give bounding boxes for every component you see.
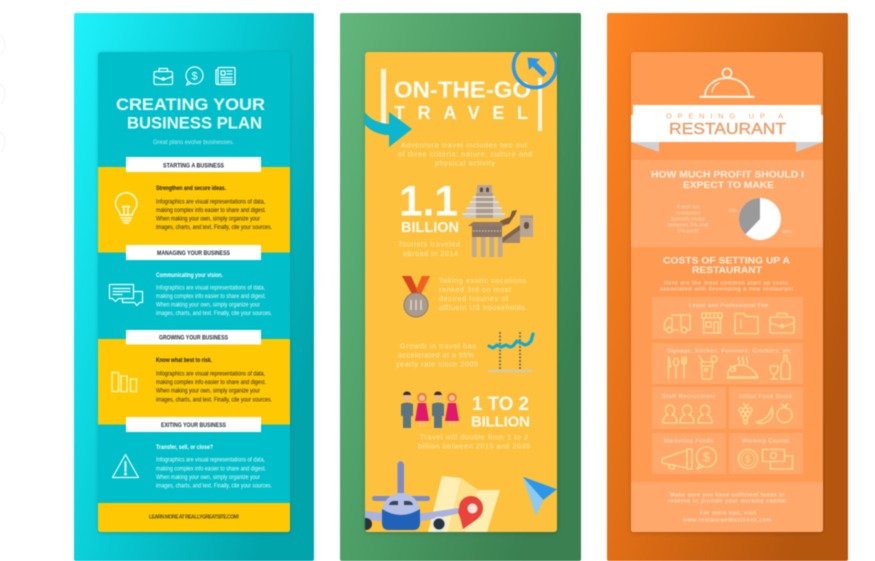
icon: dollar bubble: $ [191,70,198,82]
icon: storefront [702,313,722,333]
icon: teal curved arrow [364,112,412,148]
section: growing your business [98,330,290,424]
section: managing your business: MANAGING YOUR BUSINESS [157,250,230,257]
section: starting a business [98,157,290,252]
footer note: For more tips, visit [700,511,756,517]
line chart [488,332,533,371]
footer note: reserve to provide your working capital [668,498,786,504]
box: working capital: Working Capital [742,439,789,445]
stat: 1.1 billion: BILLION [401,220,459,236]
section: managing your business: Infographics are visual representations of data, [156,284,265,292]
intro paragraph: Adventure travel includes two out [401,140,527,150]
text: growth in travel: yearly rate since 2005 [396,360,478,369]
icon: map [428,476,500,532]
profit description [668,204,708,234]
decorative carousel circles at left edge [0,32,5,155]
icon: roast chicken [727,357,758,378]
section: exiting your business: images, charts, and text. Finally, cite your sources. [156,483,272,490]
text: growth in travel [396,342,478,369]
title ribbon: RESTAURANT [669,121,787,138]
text: exotic vacations: affluent US households [439,303,525,312]
section: starting a business: images, charts, and text. Finally, cite your sources. [156,224,272,231]
pie chart [728,198,792,240]
text: exotic vacations: ranked 3rd on most [439,285,511,294]
box: signage kitchen furniture [652,343,803,384]
icon: dollar bubble [186,67,203,85]
inner poster background [98,52,290,532]
stat: 1.1 billion: abroad in 2014 [403,249,458,258]
section heading: costs [660,255,794,293]
stat: 1 to 2 billion: 1 TO 2 [472,393,529,415]
coin dollar: $ [745,454,751,466]
section: growing your business: Infographics are visual representations of data, [156,370,265,377]
title [394,77,531,123]
panel: travel card [340,13,581,561]
icon: world monuments [462,185,533,257]
stat: 1.1 billion: 1.1 [399,178,458,226]
box: working capital [729,433,803,474]
icon: drink glass [699,356,717,379]
icon: folder [735,314,758,334]
profit description: A well run [676,204,700,210]
section: managing your business [110,245,272,317]
icon: wine and bottle [770,355,790,379]
text: growth in travel: Growth in travel has [400,342,476,351]
section: starting a business: Strengthen and secure ideas. [156,185,226,192]
text: exotic vacations [439,276,526,312]
text: growth in travel: accelerated at a 65% [398,351,475,360]
icon: briefcase [154,68,172,84]
icon: grapes, melon, orange [739,403,792,424]
section heading: costs: Here are the most common start up costs [664,280,788,286]
section: starting a business: When making your own, simply organize your [156,216,261,222]
intro paragraph [398,140,532,168]
section: exiting your business: Infographics are visual representations of data, [156,457,265,464]
title [116,96,265,132]
icon: paper plane [523,477,557,516]
stat: 1.1 billion: Tourists traveled [398,240,460,249]
profit description: 5% profit [677,228,699,234]
stepped pyramid [462,185,505,218]
icon: blue circular arrow [514,44,556,88]
stat: 1 to 2 billion [418,393,530,450]
box: marketing funds [652,433,726,474]
box: marketing funds: Marketing Funds [664,439,713,445]
stat: 1.1 billion [398,178,460,258]
subtitle: Great plans evolve businesses. [153,139,234,146]
icon: warning triangle [112,454,138,478]
stat: 1 to 2 billion: BILLION [471,414,530,431]
intro paragraph: of three criteria: nature, culture and [398,150,532,159]
box: initial food stock [729,387,803,429]
icon: megaphone and dollar [662,447,716,469]
section heading: costs: COSTS OF SETTING UP A [663,255,791,265]
section: profit [631,160,823,247]
section: profit: HOW MUCH PROFIT SHOULD I [651,170,804,180]
section: exiting your business [112,417,272,490]
inner poster background [631,52,823,532]
section: exiting your business: making complex info easier to share and digest. [156,465,266,472]
panel: restaurant card [607,13,848,561]
text: exotic vacations: desired luxuries of [439,294,508,303]
profit description: restaurant [676,210,701,216]
stat: 1 to 2 billion: Travel will double from 1 to 2 [420,432,528,441]
title ribbon [631,105,823,152]
section: growing your business: When making your own, simply organize your [156,388,261,395]
section: growing your business: Know what best to risk. [156,357,212,364]
footer note: Make sure you have sufficient funds in [670,492,784,498]
section: growing your business: GROWING YOUR BUSINESS [159,335,228,342]
section heading: costs: RESTAURANT [692,265,763,275]
section: profit: EXPECT TO MAKE [683,180,774,190]
title: BUSINESS PLAN [127,114,262,132]
profit description: typically make [671,216,705,222]
box: lease and professional fee: Lease and Professional Fee [689,303,768,309]
section: growing your business: making complex info easier to share and digest. [156,379,266,386]
pie chart: 40% [728,208,738,213]
box: lease and professional fee [652,297,803,339]
section: starting a business: making complex info easier to share and digest. [156,207,266,214]
section: exiting your business: When making your own, simply organize your [156,474,261,481]
title ribbon: OPENING UP A [666,111,783,120]
icon: bar chart [112,372,136,392]
icon: chat bubbles [110,284,142,306]
box: staff recruitment: Staff Recruitment [662,394,716,400]
footer banner: LEARN MORE AT REALLYGREATSITE.COM! [149,515,239,521]
icon: briefcase [770,314,794,333]
inner poster background [365,52,557,532]
section: managing your business: making complex info easier to share and digest. [156,293,266,300]
box: initial food stock: Initial Food Stock [739,394,792,400]
section: managing your business: images, charts, and text. Finally, cite your sources. [156,310,272,317]
title: TRAVEL [394,103,528,123]
text: exotic vacations: Taking exotic vacations [439,276,526,285]
icon: food cloche [700,68,754,97]
footer note [631,482,823,532]
title bars [381,69,542,131]
section: starting a business: STARTING A BUSINESS [163,162,224,170]
icon: truck [664,315,690,333]
section: exiting your business: EXITING YOUR BUSINESS [161,422,226,429]
box: staff recruitment [652,387,726,429]
icon: location pin [458,496,483,529]
icon: people group [401,392,459,428]
footer note: www.restaurantbusiness.com [682,517,772,523]
profit description: between 3% and [668,222,708,228]
icon: airplane [360,461,466,532]
great wall [500,210,533,243]
icon: cutlery [668,357,686,378]
section heading: costs: associated with developing a new restaurant [660,287,794,293]
dollar sign: $ [703,450,711,464]
section: growing your business: images, charts, and text. Finally, cite your sources. [156,396,272,403]
icon: people [663,405,712,423]
pie chart: 60% [782,229,792,234]
section: exiting your business: Transfer, sell, or close? [156,444,213,451]
stat: 1 to 2 billion: billion between 2015 and 2035 [418,441,530,450]
icon: light bulb [116,193,137,223]
icon: medal [402,276,430,317]
title: ON-THE-GO [394,77,531,103]
icon: newspaper [216,68,235,84]
intro paragraph: physical activity [435,159,495,168]
section: starting a business: Infographics are visual representations of data, [156,198,265,206]
title: CREATING YOUR [116,96,265,114]
footer banner [98,503,290,532]
brandenburg gate [468,222,505,257]
section: managing your business: Communicating your vision. [156,272,223,279]
box: signage kitchen furniture: Signage, Kitchen, Furniture, Crockery, etc [667,348,791,354]
section: managing your business: When making your own, simply organize your [156,302,261,309]
panel: business plan card [74,13,314,561]
icon: coin and banknotes [738,450,792,469]
